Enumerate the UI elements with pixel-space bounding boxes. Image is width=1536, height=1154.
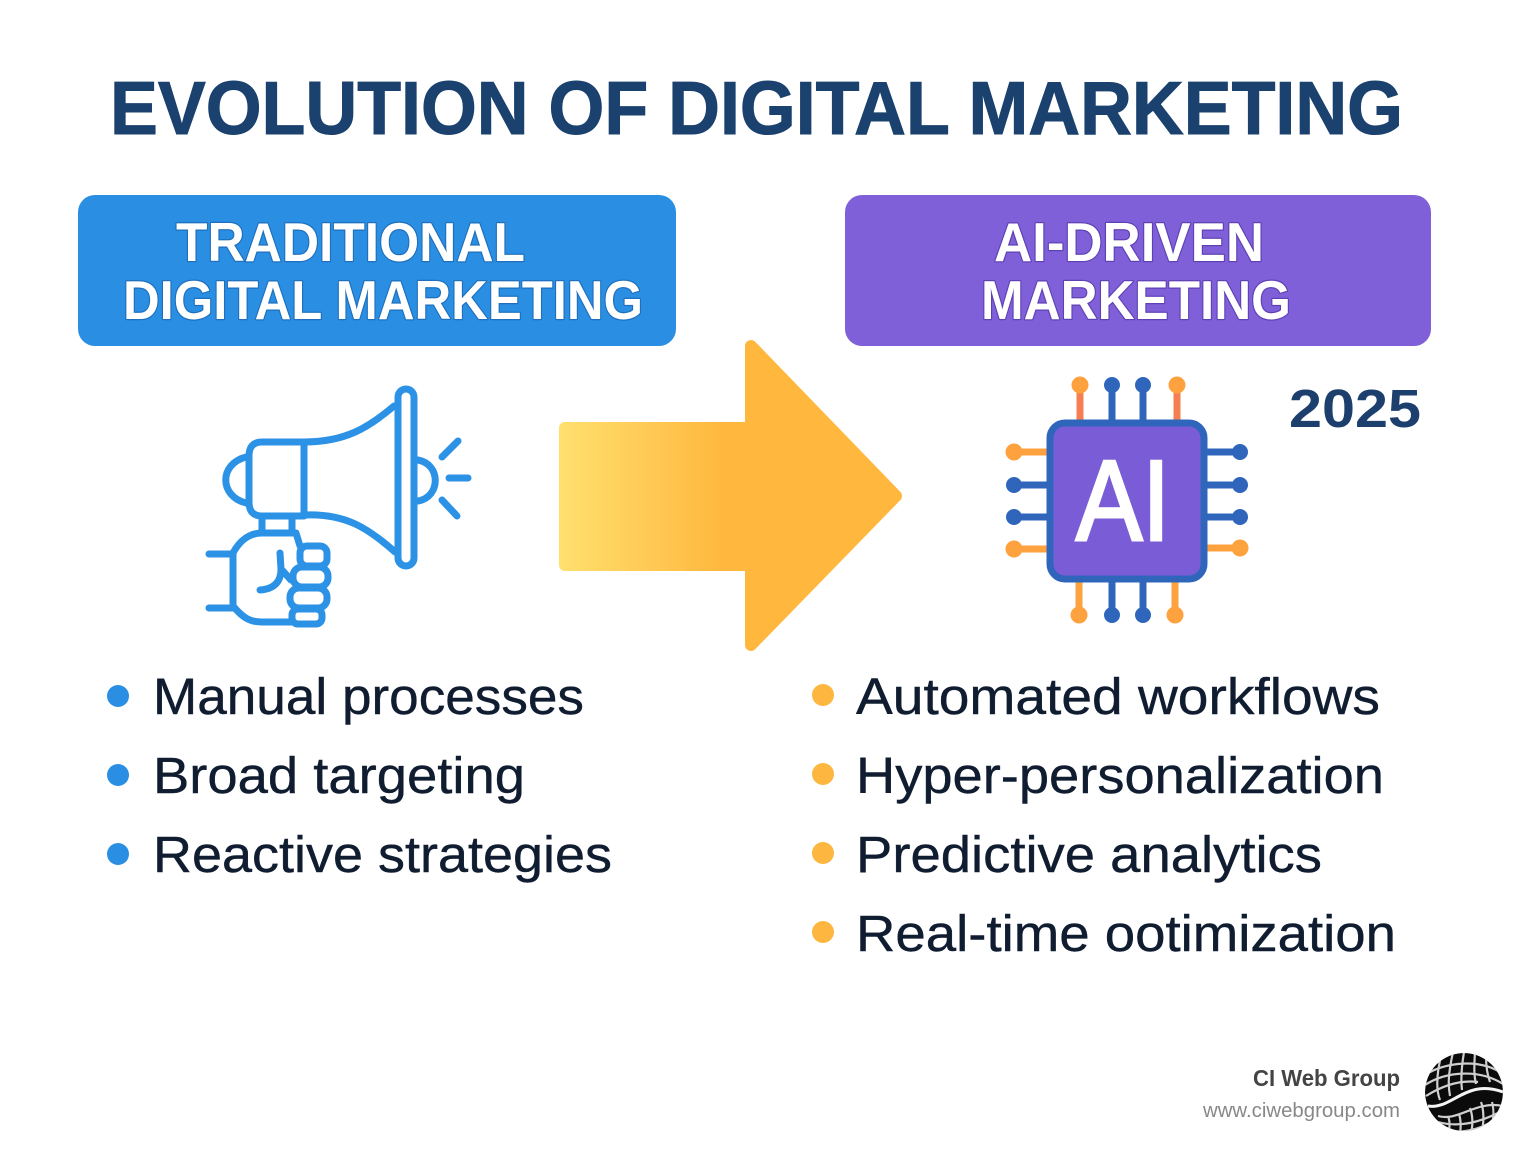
list: traditional traits: Manual processes [153, 668, 584, 725]
footer: company credit: CI Web Group [1253, 1065, 1400, 1091]
list: traditional traits [107, 668, 612, 883]
list: AI-driven traits [812, 668, 1396, 962]
panel: AI-driven header: MARKETING [981, 269, 1291, 331]
list: AI-driven traits: Predictive analytics [856, 826, 1322, 883]
list: AI-driven traits: Hyper-personalization [856, 747, 1384, 804]
list: AI-driven traits: Real-time ootimization [856, 905, 1396, 962]
year label: 2025 [1289, 379, 1421, 439]
panel: AI-driven header: AI-DRIVEN [994, 211, 1264, 273]
title: EVOLUTION OF DIGITAL MARKETING [110, 66, 1403, 150]
icon: AI chip: AI [1076, 438, 1170, 565]
panel: traditional header [78, 195, 676, 346]
arrow: evolution direction [565, 346, 896, 645]
footer: company credit: www.ciwebgroup.com [1202, 1100, 1400, 1122]
list: traditional traits: Broad targeting [153, 747, 525, 804]
panel: AI-driven header [845, 195, 1431, 346]
panel: traditional header: TRADITIONAL [176, 211, 525, 273]
panel: traditional header: DIGITAL MARKETING [123, 269, 643, 331]
icon: AI chip [1006, 376, 1248, 624]
footer: company credit [1202, 1065, 1400, 1122]
icon: globe logo [1425, 1052, 1503, 1132]
icon: megaphone held in fist [209, 389, 468, 624]
list: traditional traits: Reactive strategies [153, 826, 612, 883]
list: AI-driven traits: Automated workflows [856, 668, 1380, 725]
